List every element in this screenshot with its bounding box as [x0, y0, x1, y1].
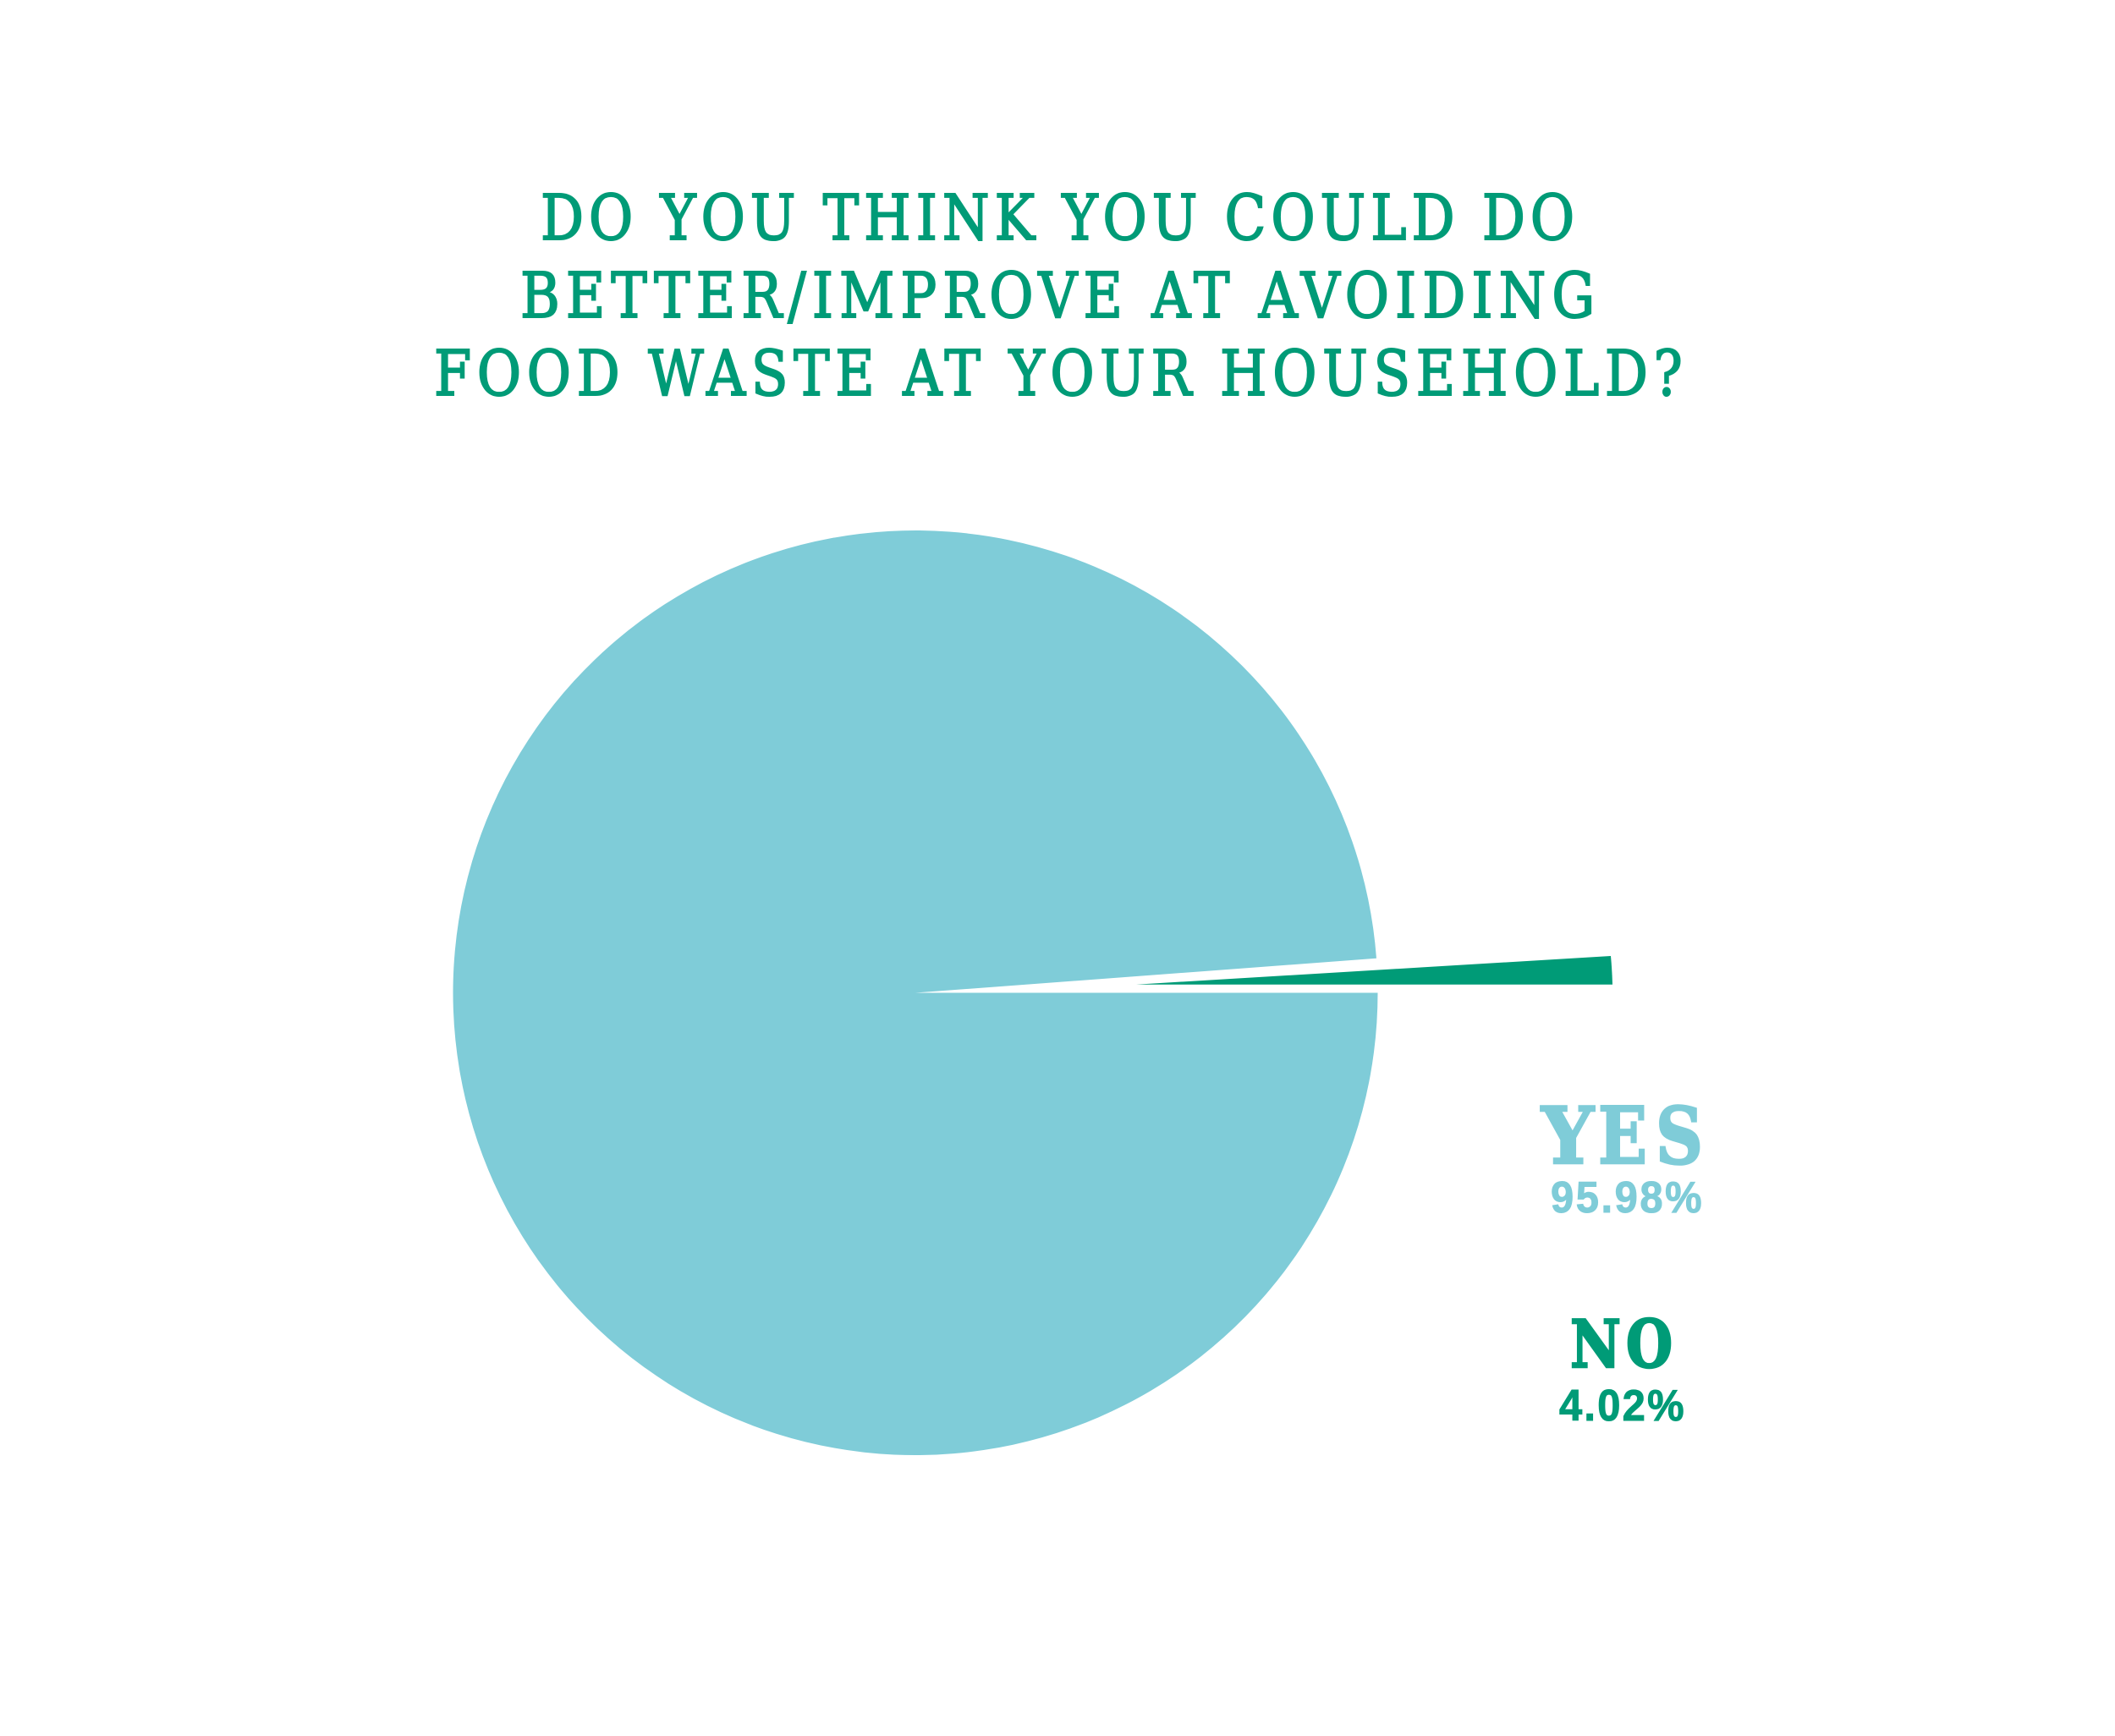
legend: no: [1559, 1306, 1684, 1430]
title: FOOD WASTE AT YOUR HOUSEHOLD?: [434, 338, 1683, 410]
legend: yes: E: [1598, 1090, 1647, 1182]
title: BETTER/IMPROVE AT AVOIDING: [520, 260, 1595, 332]
pie slice: no 4.02%: [1136, 956, 1612, 985]
legend: yes: 95.98%: [1551, 1173, 1702, 1222]
legend: yes: Y: [1541, 1090, 1596, 1182]
pie slice: yes 95.98%: [453, 530, 1377, 1455]
legend: yes: S: [1656, 1090, 1703, 1182]
legend: no: N: [1570, 1306, 1621, 1383]
title: DO YOU THINK YOU COULD DO: [541, 182, 1574, 255]
title: [434, 182, 1683, 410]
legend: no: O: [1626, 1306, 1673, 1383]
legend: yes: [1541, 1090, 1703, 1222]
pie chart: [453, 530, 1612, 1455]
legend: no: 4.02%: [1559, 1381, 1684, 1430]
